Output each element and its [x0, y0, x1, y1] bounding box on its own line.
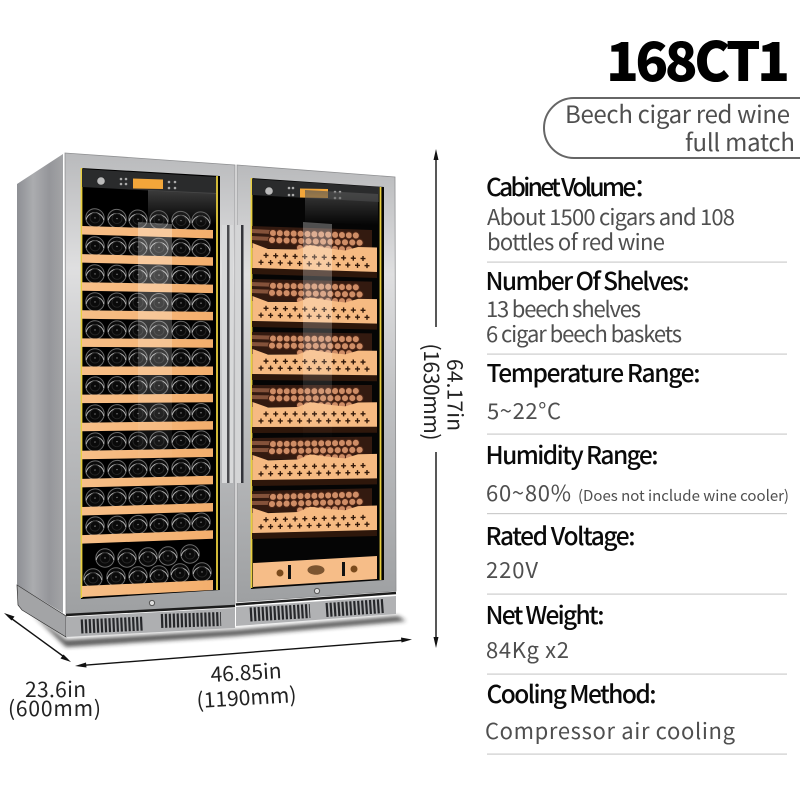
control panel — [252, 179, 379, 202]
subtitle pill: Beech cigar red wine — [565, 95, 790, 130]
height dimension arrow — [434, 149, 438, 648]
spec: cabinet volume — [486, 169, 735, 257]
wine rows and beech shelves — [82, 208, 213, 544]
spec: humidity range: Humidity Range: — [486, 437, 658, 472]
left door frame — [65, 153, 235, 637]
height label: 64.17in — [440, 359, 470, 431]
door locks — [149, 588, 320, 606]
cigar baskets — [252, 226, 377, 543]
spec: number of shelves: 6 cigar beech baskets — [486, 317, 682, 349]
subtitle pill: full match — [685, 123, 795, 158]
spec: humidity range: (Does not include wine cooler) — [578, 485, 789, 506]
spec: net weight: 84Kg x2 — [486, 633, 569, 665]
right door: cigar section — [251, 178, 384, 589]
spec: cooling method — [485, 676, 736, 746]
glass — [251, 178, 384, 589]
spec: rated voltage: 220V — [486, 553, 538, 585]
spec: cabinet volume: Cabinet Volume： — [486, 169, 658, 204]
yellow seal — [252, 178, 380, 588]
depth label — [8, 674, 101, 723]
width dimension arrow — [75, 638, 412, 668]
spec: temperature range: Temperature Range: — [486, 355, 700, 390]
floor shadow — [30, 612, 406, 647]
width label: (1190mm) — [196, 679, 297, 715]
model title: 168CT1 — [606, 18, 790, 97]
spec: number of shelves — [486, 263, 690, 349]
spec: humidity range: 60~80% — [486, 476, 571, 508]
control panel — [82, 169, 216, 194]
product: dual-zone cabinet — [17, 153, 406, 647]
depth label: 23.6in — [25, 674, 86, 704]
base vents — [81, 606, 384, 626]
spec: cooling method: Compressor air cooling — [485, 714, 736, 746]
spec: cooling method: Cooling Method: — [486, 676, 656, 711]
spec: temperature range: 5~22°C — [487, 394, 561, 426]
height label — [417, 344, 470, 440]
depth dimension arrow — [4, 613, 71, 662]
beech front panel — [253, 556, 377, 587]
spec: cabinet volume: About 1500 cigars and 108 — [487, 200, 735, 232]
width label — [196, 655, 297, 715]
spec: cabinet volume: bottles of red wine — [487, 225, 665, 257]
spec: rated voltage: Rated Voltage: — [486, 518, 636, 553]
cabinet side panel — [17, 154, 66, 637]
height label: (1630mm) — [417, 344, 447, 440]
spec: number of shelves: 13 beech shelves — [486, 292, 641, 324]
yellow seal — [82, 168, 217, 598]
left door: wine section — [81, 168, 220, 599]
spec: humidity range — [486, 437, 789, 508]
spec: net weight: Net Weight: — [486, 597, 604, 632]
width label: 46.85in — [210, 655, 282, 689]
spec: number of shelves: Number Of Shelves: — [486, 263, 690, 298]
spec: net weight — [486, 597, 604, 665]
right door frame — [236, 165, 396, 626]
glass — [81, 168, 220, 599]
glass reflection — [303, 190, 378, 440]
spec: rated voltage — [486, 518, 636, 585]
depth label: (600mm) — [8, 693, 101, 723]
bottom bottle stack — [82, 545, 213, 597]
spec: temperature range — [486, 355, 700, 426]
door handles — [222, 225, 244, 483]
subtitle pill — [544, 95, 800, 158]
glass reflection — [138, 190, 216, 470]
